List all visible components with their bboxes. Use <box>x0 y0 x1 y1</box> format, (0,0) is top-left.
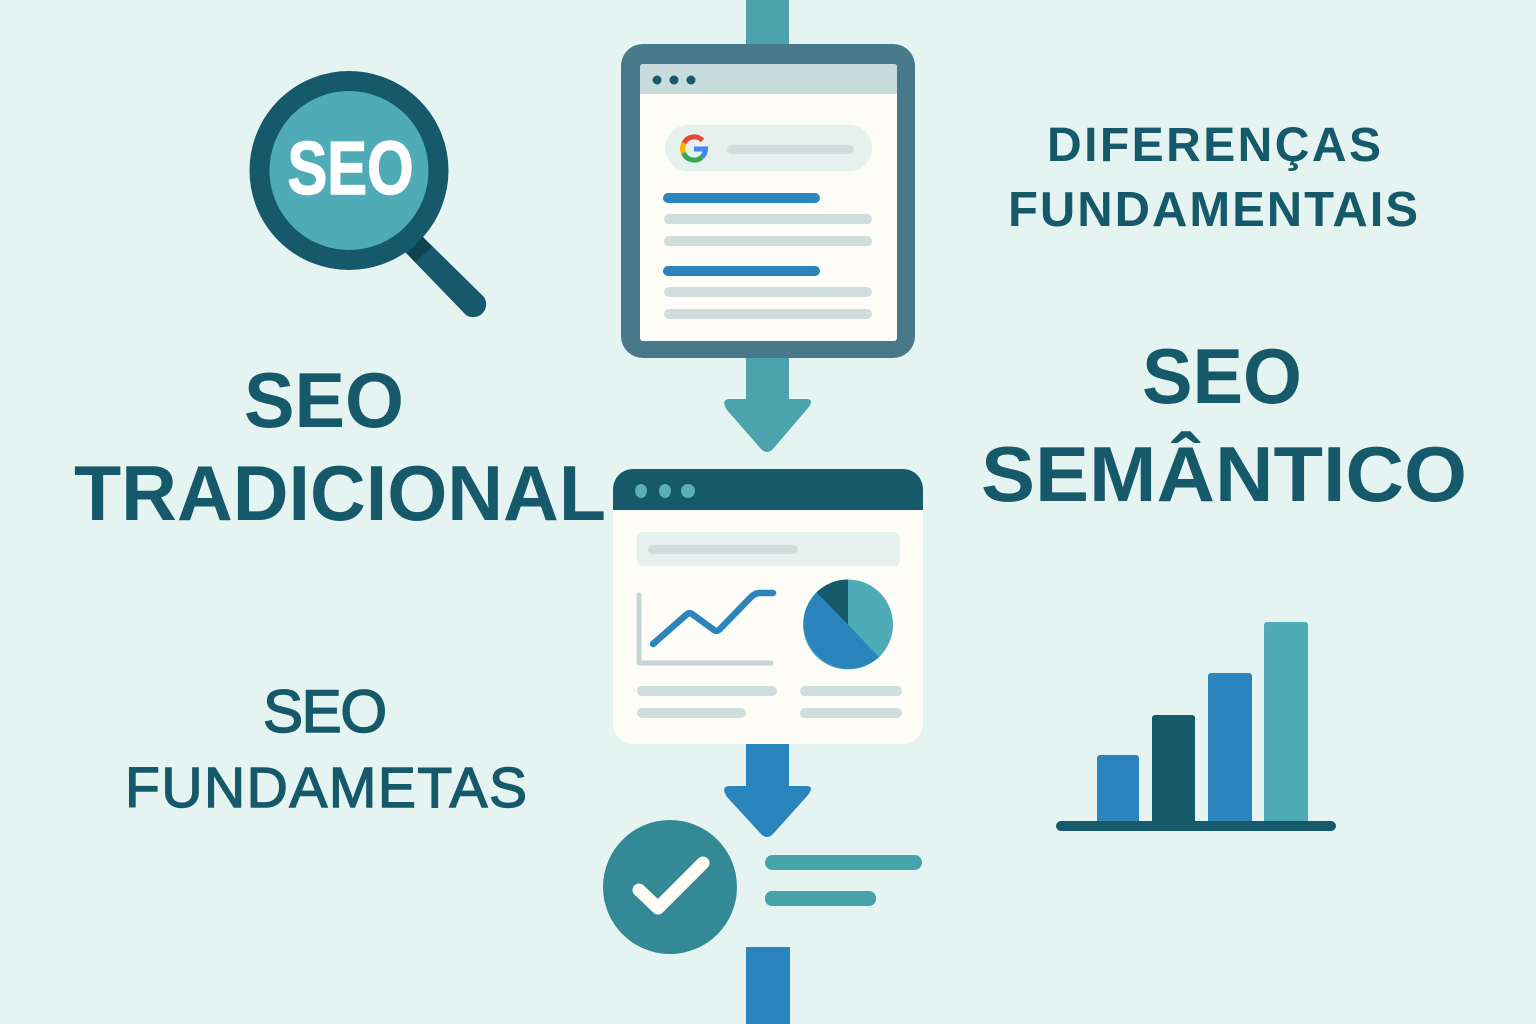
heading: SEO fundametas: FUNDAMETAS <box>125 756 527 820</box>
heading: diferenças fundamentais <box>1008 119 1418 237</box>
heading: diferenças fundamentais: FUNDAMENTAIS <box>1008 183 1418 237</box>
icon: check circle <box>603 820 737 954</box>
heading: SEO tradicional: SEO <box>244 356 404 444</box>
heading: SEO fundametas <box>125 678 527 820</box>
heading: SEO fundametas: SEO <box>263 678 387 745</box>
icon: SEO magnifying glass <box>260 81 486 317</box>
heading: SEO tradicional <box>74 356 606 537</box>
heading: SEO semântico: SEO <box>1142 332 1302 420</box>
panel: analytics dashboard window <box>613 469 923 744</box>
arrow: blue down <box>724 744 811 837</box>
icon: SEO magnifying glass: SEO <box>288 126 414 210</box>
bottom connector <box>746 947 790 1024</box>
pie chart <box>803 579 893 670</box>
line chart <box>639 593 773 663</box>
arrow: teal down <box>724 358 811 452</box>
heading: SEO semântico <box>981 332 1467 518</box>
panel: search results window <box>621 44 915 358</box>
heading: SEO semântico: SEMÂNTICO <box>981 430 1467 518</box>
result lines <box>765 855 922 906</box>
top connector <box>746 0 789 46</box>
heading: diferenças fundamentais: DIFERENÇAS <box>1047 119 1381 172</box>
bar chart <box>1056 622 1336 831</box>
heading: SEO tradicional: TRADICIONAL <box>74 449 606 537</box>
icon: Google G <box>683 137 706 160</box>
